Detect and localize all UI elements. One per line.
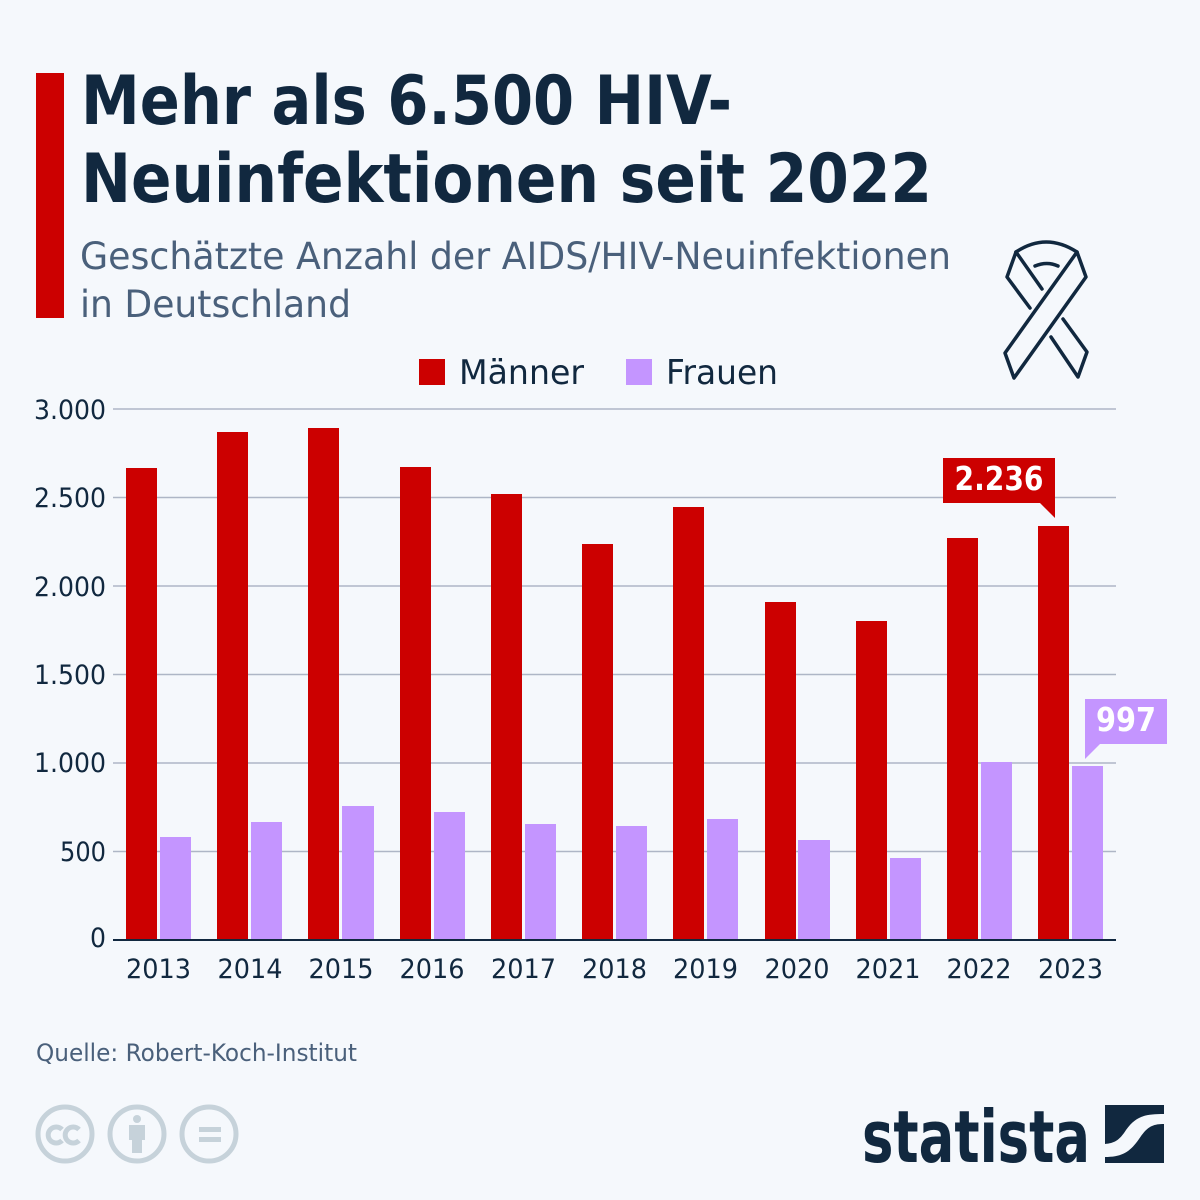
icon: statista mark xyxy=(1105,1105,1164,1144)
grid lines and y axis labels: 2.000 xyxy=(34,572,106,603)
subtitle: Geschätzte Anzahl der AIDS/HIV-Neuinfektionen xyxy=(80,235,951,278)
grid lines and y axis labels: 500 xyxy=(60,837,106,868)
subtitle xyxy=(80,235,951,326)
bars: Frauen xyxy=(160,762,1103,940)
x axis labels: 2018 xyxy=(582,954,647,985)
logo: statista: statista xyxy=(862,1095,1090,1179)
icon: awareness ribbon xyxy=(1005,242,1087,378)
callout: Männer 2023: 2.236 xyxy=(954,459,1044,498)
title accent bar xyxy=(36,73,64,318)
source: Quelle: Robert-Koch-Institut xyxy=(36,1039,357,1067)
x axis labels: 2014 xyxy=(218,954,282,985)
callout: Frauen 2023: 997 xyxy=(1096,700,1156,739)
legend xyxy=(419,353,778,393)
grid lines and y axis labels: 2.500 xyxy=(34,483,106,514)
grid lines and y axis labels: 1.000 xyxy=(34,748,106,779)
title xyxy=(81,62,932,219)
x axis labels: 2022 xyxy=(946,954,1012,985)
x axis labels: 2015 xyxy=(308,954,374,985)
x axis line xyxy=(113,939,1116,941)
title: Neuinfektionen seit 2022 xyxy=(81,140,932,219)
x axis labels: 2023 xyxy=(1038,954,1103,985)
x axis labels: 2017 xyxy=(491,954,556,985)
grid lines and y axis labels: 0 xyxy=(90,923,106,954)
title: Mehr als 6.500 HIV- xyxy=(81,62,732,141)
callout: Frauen 2023 xyxy=(1085,699,1167,759)
legend: Männer xyxy=(459,353,584,393)
bar chart xyxy=(34,395,1167,985)
x axis labels: 2020 xyxy=(764,954,830,985)
subtitle: in Deutschland xyxy=(80,283,351,326)
icon: creative commons licence xyxy=(38,1107,236,1161)
grid lines and y axis labels: 3.000 xyxy=(34,395,106,426)
x axis labels: 2019 xyxy=(673,954,738,985)
grid lines and y axis labels xyxy=(34,395,1116,954)
x axis labels xyxy=(126,954,1103,985)
legend: Frauen xyxy=(666,353,778,393)
bars: Männer xyxy=(126,428,1069,940)
x axis labels: 2013 xyxy=(126,954,191,985)
grid lines and y axis labels: 1.500 xyxy=(34,660,106,691)
x axis labels: 2016 xyxy=(400,954,464,985)
x axis labels: 2021 xyxy=(856,954,920,985)
callout: Männer 2023 xyxy=(943,458,1055,518)
